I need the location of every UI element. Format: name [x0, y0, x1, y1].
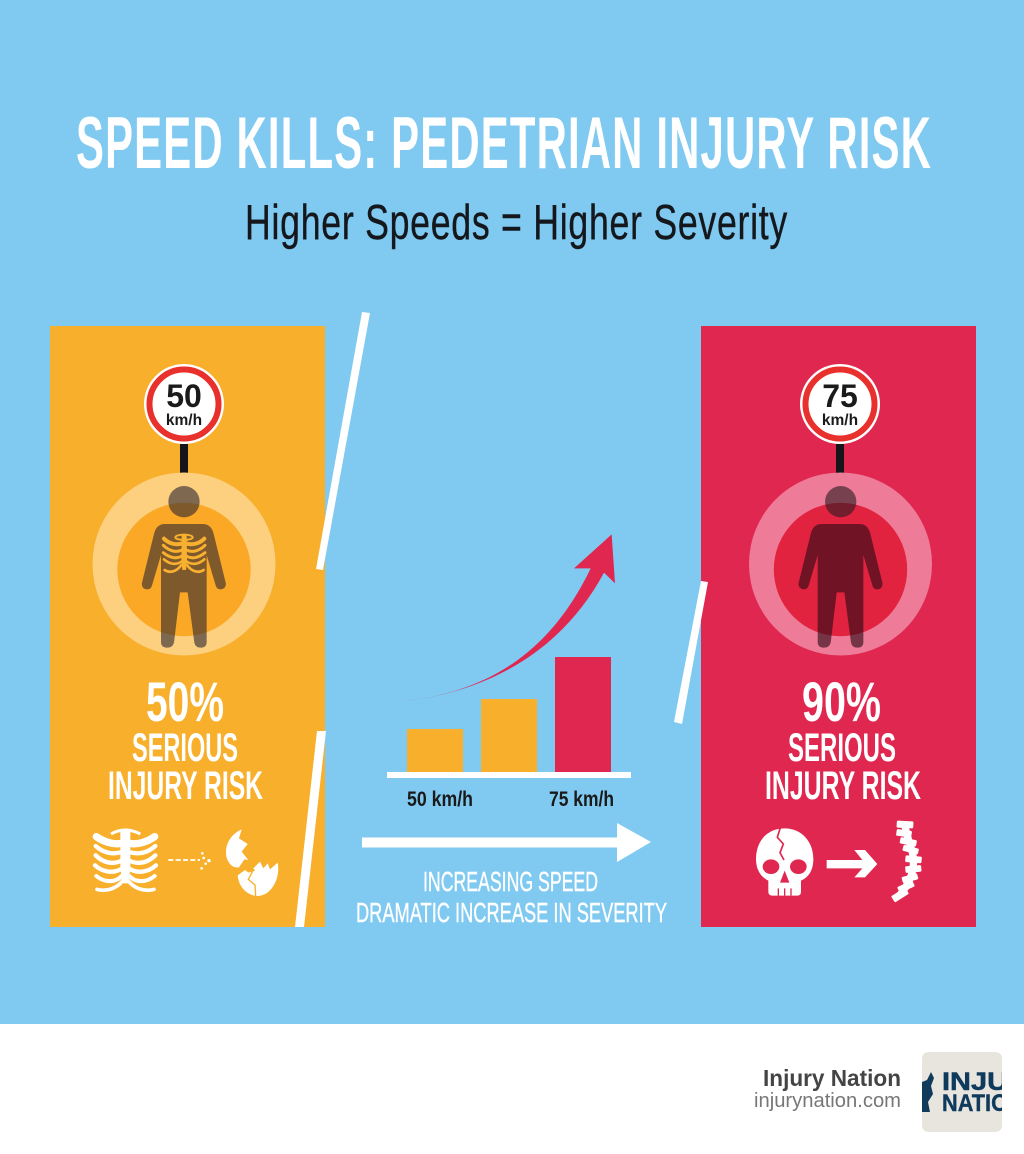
subtitle: Higher Speeds = Higher Severity: [245, 196, 788, 250]
caption: increasing speed: [356, 866, 667, 928]
label: serious injury risk: [108, 726, 263, 808]
speed limit sign: 75 km/h: 75: [822, 378, 858, 414]
axis labels: [407, 788, 614, 811]
icon: pedestrian: [142, 486, 226, 648]
arrow: increasing speed: [362, 823, 651, 862]
label: serious injury risk: SERIOUS: [132, 726, 238, 770]
bar: 50 km/h: [407, 729, 463, 772]
caption: increasing speed: DRAMATIC INCREASE IN SEVERITY: [356, 897, 667, 928]
bar: 75 km/h: [555, 657, 611, 772]
label: serious injury risk: [765, 726, 921, 808]
stat: 50%: 50%: [146, 670, 224, 733]
panel: 50 km/h: [50, 326, 325, 927]
icon: fractured skull: [756, 828, 813, 896]
speed limit sign: 50 km/h: 50: [166, 378, 202, 414]
stat: 90%: 90%: [802, 670, 881, 733]
logo: NATIO: [942, 1090, 1008, 1117]
speed limit sign: 75 km/h: km/h: [822, 412, 858, 429]
arrow: [827, 850, 877, 877]
axis labels: 50 km/h: [407, 788, 473, 811]
arrow: rising curve: [407, 534, 615, 701]
label: serious injury risk: INJURY RISK: [765, 764, 921, 808]
logo: [922, 1052, 1008, 1132]
chart: speed versus severity: [387, 534, 631, 811]
brand url: injurynation.com: [754, 1090, 901, 1112]
panel: 75 km/h: [701, 326, 976, 927]
label: serious injury risk: INJURY RISK: [108, 764, 263, 808]
arrow: dashed: [168, 852, 211, 870]
icon: rib cage: [95, 830, 156, 890]
slash accents: [295, 312, 708, 927]
icon: rib cage on torso: [163, 535, 205, 572]
speed limit sign: 75 km/h: [800, 364, 880, 473]
speed limit sign: 50 km/h: [144, 364, 224, 473]
logo: INJU: [942, 1068, 1008, 1096]
label: serious injury risk: SERIOUS: [788, 726, 896, 770]
icon: pedestrian: [799, 486, 883, 648]
injury circle: [749, 472, 932, 656]
caption: increasing speed: INCREASING SPEED: [423, 866, 598, 897]
icon: cracked bone: [226, 829, 278, 896]
bar: middle speed: [481, 699, 537, 772]
icon: fractured skull to arrow: [756, 828, 877, 896]
axis labels: 75 km/h: [549, 788, 614, 811]
axis: [387, 772, 631, 778]
icon: rib cage to broken bone: [95, 829, 278, 896]
brand name: Injury Nation: [763, 1065, 901, 1091]
speed limit sign: 50 km/h: km/h: [166, 412, 202, 429]
footer brand: [754, 1052, 1008, 1132]
icon: spine: [891, 821, 922, 903]
injury circle: [92, 472, 276, 656]
